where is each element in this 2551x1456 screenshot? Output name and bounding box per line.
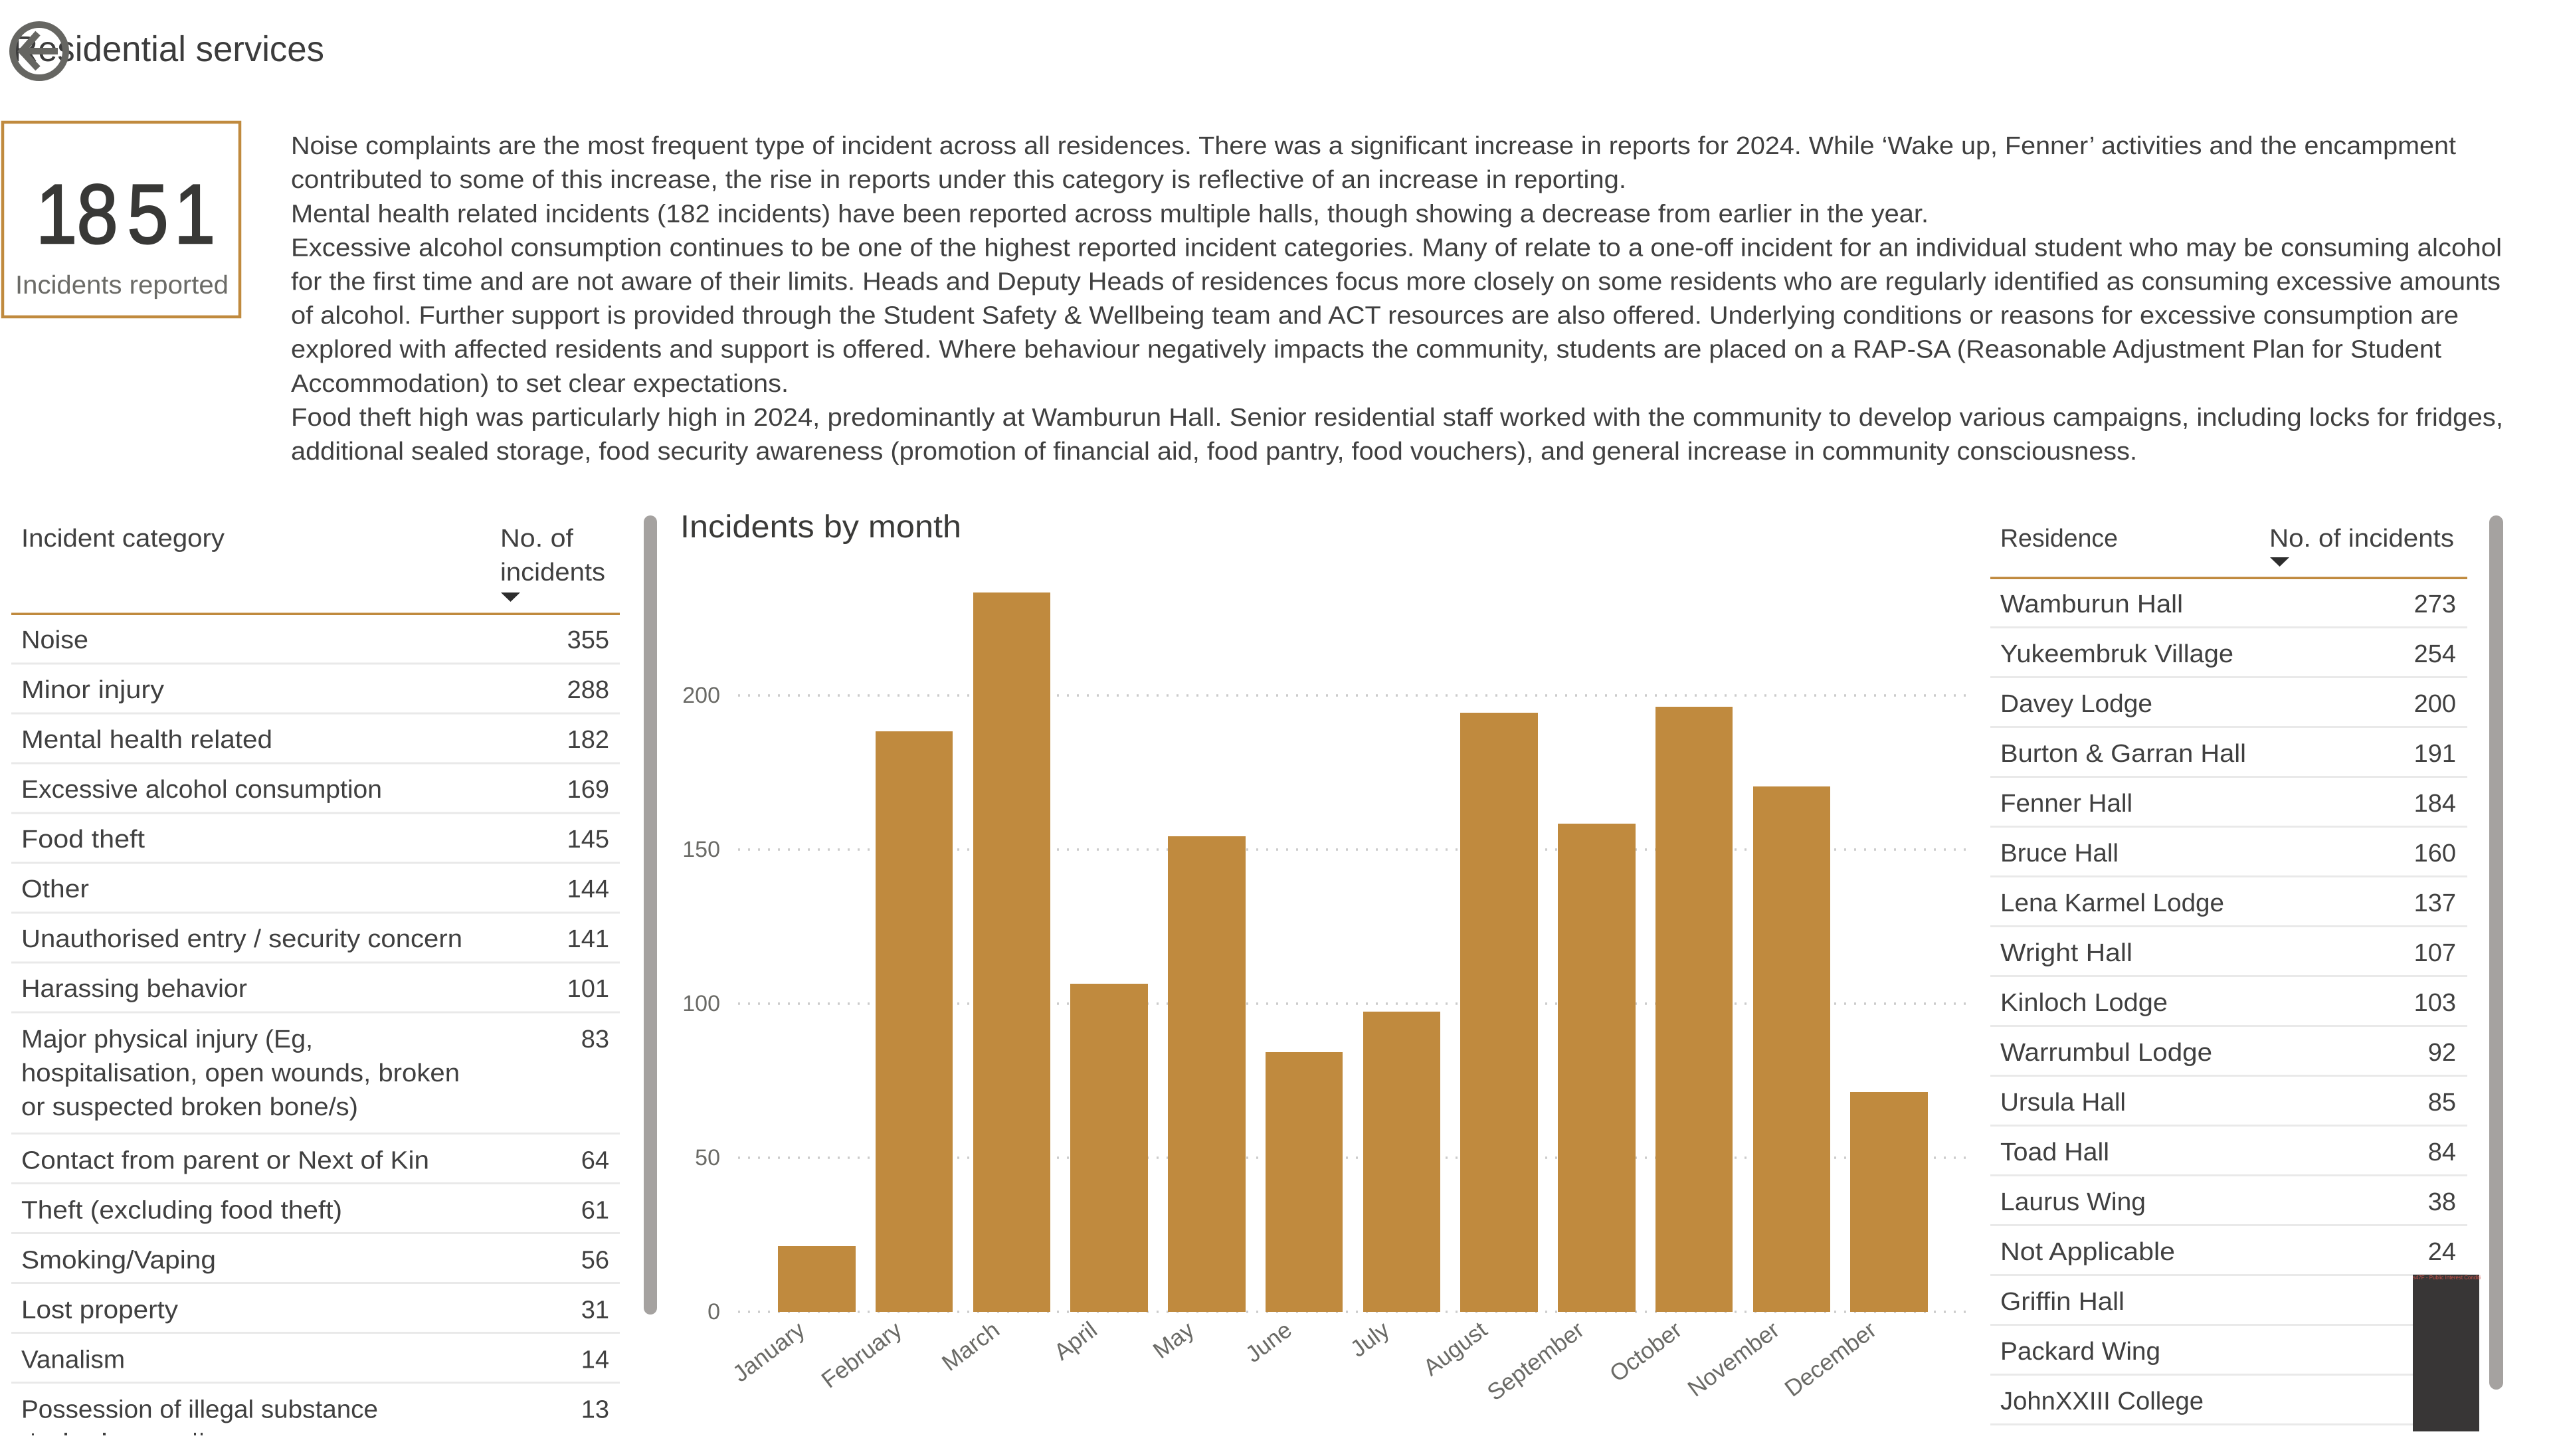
row: Warrumbul Lodge xyxy=(2000,1039,2456,1067)
commentary text block: contributed to some of this increase, the rise in reports under this category is reflective of an increase in reporting. xyxy=(291,166,1626,194)
row: Not Applicable: 24 xyxy=(2428,1238,2456,1266)
row: Vanalism: Vanalism xyxy=(21,1346,125,1374)
row: Yukeembruk Village: Yukeembruk Village xyxy=(2000,640,2233,668)
row: Kinloch Lodge xyxy=(2000,989,2456,1017)
commentary text block: Accommodation) to set clear expectations. xyxy=(291,370,789,398)
row: Mental health related: Mental health related xyxy=(21,726,272,754)
row: Not Applicable: Not Applicable xyxy=(2000,1238,2175,1266)
row: Fenner Hall: 184 xyxy=(2414,790,2456,818)
row: Possession of illegal substance: Possession of illegal substance xyxy=(21,1396,378,1424)
row: Unauthorised entry: 141 xyxy=(567,925,609,953)
row: Excessive alcohol consumption: Excessive alcohol consumption xyxy=(21,776,382,804)
panel: residence table xyxy=(1990,525,2467,1425)
row: Ursula Hall: Ursula Hall xyxy=(2000,1089,2126,1117)
y axis labels: 100 xyxy=(682,991,720,1016)
row: Other xyxy=(21,875,609,903)
row: Burton & Garran Hall: 191 xyxy=(2414,740,2456,768)
row: Burton & Garran Hall xyxy=(2000,740,2456,768)
commentary text block: additional sealed storage, food security awareness (promotion of financial aid, food pantry, food vouchers), and general increase in community consciousness. xyxy=(291,438,2137,466)
row: Bruce Hall: 160 xyxy=(2414,840,2456,867)
row: Lost property: Lost property xyxy=(21,1297,178,1324)
row: Major physical injury: or suspected broken bone/s) xyxy=(21,1093,358,1121)
row: Minor injury: 288 xyxy=(567,676,609,704)
row: Wamburun Hall: Wamburun Hall xyxy=(2000,591,2183,618)
row: Ursula Hall xyxy=(2000,1089,2456,1117)
row: Bruce Hall: Bruce Hall xyxy=(2000,840,2119,867)
panel: incident category table xyxy=(11,525,620,1435)
table header: incident category: No. of xyxy=(500,525,573,553)
row: Excessive alcohol consumption xyxy=(21,776,609,804)
row: Noise: 355 xyxy=(567,626,609,654)
x axis month labels: January xyxy=(728,1317,810,1387)
row: Toad Hall xyxy=(2000,1138,2456,1166)
x axis month labels: July xyxy=(1346,1317,1394,1362)
row: Minor injury: Minor injury xyxy=(21,676,164,704)
y axis labels xyxy=(682,683,720,1324)
x axis month labels: May xyxy=(1149,1317,1199,1364)
table header: incident category: incidents xyxy=(500,559,605,587)
table header: residence xyxy=(1990,525,2467,579)
row: Major physical injury xyxy=(21,1026,609,1121)
x axis month labels: February xyxy=(816,1317,907,1394)
row: Contact from parent: Contact from parent or Next of Kin xyxy=(21,1146,429,1174)
redaction box: s47F xyxy=(2413,1274,2481,1431)
row: Wright Hall: Wright Hall xyxy=(2000,939,2132,967)
commentary text block: Mental health related incidents (182 incidents) have been reported across multiple halls, though showing a decrease from earlier in the year. xyxy=(291,201,1929,228)
row: Smoking/Vaping: 56 xyxy=(581,1246,609,1274)
row: Laurus Wing: 38 xyxy=(2428,1188,2456,1216)
row: Warrumbul Lodge: 92 xyxy=(2428,1039,2456,1067)
row: Unauthorised entry: Unauthorised entry / security concern xyxy=(21,925,462,953)
row: Minor injury xyxy=(21,676,609,704)
row: Mental health related: 182 xyxy=(567,726,609,754)
row: Warrumbul Lodge: Warrumbul Lodge xyxy=(2000,1039,2212,1067)
table header: incident category: Incident category xyxy=(21,525,225,553)
row: Other: Other xyxy=(21,875,89,903)
chart title: Incidents by month xyxy=(680,509,961,545)
row: Excessive alcohol consumption: 169 xyxy=(567,776,609,804)
commentary text block xyxy=(291,132,2503,466)
row: Lena Karmel Lodge: Lena Karmel Lodge xyxy=(2000,889,2224,917)
row: Vanalism: 14 xyxy=(581,1346,609,1374)
row: Possession of illegal substance xyxy=(21,1396,609,1424)
row: Wamburun Hall: 273 xyxy=(2414,591,2456,618)
y axis labels: 200 xyxy=(682,683,720,708)
x axis month labels: August xyxy=(1418,1317,1492,1381)
row: Harassing behavior: Harassing behavior xyxy=(21,975,247,1003)
x axis month labels: April xyxy=(1049,1317,1102,1366)
icon: back arrow xyxy=(13,25,66,78)
row: Burton & Garran Hall: Burton & Garran Hall xyxy=(2000,740,2246,768)
row: Mental health related xyxy=(21,726,609,754)
commentary text block: Excessive alcohol consumption continues to be one of the highest reported incident categories. Many of relate to a one-off incident for an individual student who may be consuming alcohol xyxy=(291,234,2502,262)
row: Major physical injury: Major physical injury (Eg, xyxy=(21,1026,313,1053)
row: Not Applicable xyxy=(2000,1238,2456,1266)
commentary text block: explored with affected residents and support is offered. Where behaviour negatively impacts the community, students are placed on a RAP-SA (Reasonable Adjustment Plan for Student xyxy=(291,336,2441,364)
row: Noise xyxy=(21,626,609,654)
row: Contact from parent: 64 xyxy=(581,1146,609,1174)
title: Residential services xyxy=(13,29,324,69)
row: Noise: Noise xyxy=(21,626,88,654)
row: Kinloch Lodge: Kinloch Lodge xyxy=(2000,989,2168,1017)
row: Possession of illegal substance: 13 xyxy=(581,1396,609,1424)
row: Bruce Hall xyxy=(2000,840,2456,867)
table header: residence: Residence xyxy=(2000,525,2118,553)
bars xyxy=(778,592,1928,1312)
KPI card: incidents reported: 1851 xyxy=(36,167,215,261)
row: Major physical injury: 83 xyxy=(581,1026,609,1053)
chart: incidents by month xyxy=(680,509,1966,1406)
y axis labels: 50 xyxy=(695,1145,720,1170)
row: Fenner Hall: Fenner Hall xyxy=(2000,790,2132,818)
row: Wright Hall xyxy=(2000,939,2456,967)
row: Wamburun Hall xyxy=(2000,591,2456,618)
row: Smoking/Vaping: Smoking/Vaping xyxy=(21,1246,216,1274)
row: Food theft xyxy=(21,826,609,854)
row: Harassing behavior xyxy=(21,975,609,1003)
row: Packard Wing: Packard Wing xyxy=(2000,1338,2160,1366)
commentary text block: Noise complaints are the most frequent type of incident across all residences. There was a significant increase in reports for 2024. While ‘Wake up, Fenner’ activities and the encampment xyxy=(291,132,2456,160)
x axis month labels: December xyxy=(1780,1317,1881,1402)
scrollbar: residence table xyxy=(2489,515,2503,1390)
commentary text block: of alcohol. Further support is provided through the Student Safety & Wellbeing team and ACT resources are also offered. Underlying conditions or reasons for excessive consumption are xyxy=(291,302,2459,329)
scrollbar: incident table xyxy=(644,515,657,1315)
row: Food theft: Food theft xyxy=(21,826,145,854)
row: Toad Hall: 84 xyxy=(2428,1138,2456,1166)
x axis month labels: November xyxy=(1683,1317,1784,1402)
x axis month labels: June xyxy=(1241,1317,1297,1368)
row: Lost property xyxy=(21,1297,609,1324)
x axis month labels: October xyxy=(1605,1317,1687,1387)
commentary text block: for the first time and are not aware of their limits. Heads and Deputy Heads of residences focus more closely on some residents who are regularly identified as consuming excessive amounts xyxy=(291,268,2501,296)
row: Smoking/Vaping xyxy=(21,1246,609,1274)
row: Theft: 61 xyxy=(581,1197,609,1225)
row: Lost property: 31 xyxy=(581,1297,609,1324)
row: Kinloch Lodge: 103 xyxy=(2414,989,2456,1017)
row: Theft xyxy=(21,1197,609,1225)
y axis labels: 150 xyxy=(682,837,720,862)
x axis month labels: September xyxy=(1483,1317,1589,1406)
row: Harassing behavior: 101 xyxy=(567,975,609,1003)
row: Wright Hall: 107 xyxy=(2414,939,2456,967)
row: Lena Karmel Lodge: 137 xyxy=(2414,889,2456,917)
row: Contact from parent xyxy=(21,1146,609,1174)
table header: residence: No. of incidents xyxy=(2269,525,2454,553)
row: Lena Karmel Lodge xyxy=(2000,889,2456,917)
row: Toad Hall: Toad Hall xyxy=(2000,1138,2109,1166)
row: Laurus Wing xyxy=(2000,1188,2456,1216)
row: Laurus Wing: Laurus Wing xyxy=(2000,1188,2146,1216)
table header: incident category xyxy=(11,525,620,615)
row: Davey Lodge: 200 xyxy=(2414,690,2456,718)
row: Yukeembruk Village xyxy=(2000,640,2456,668)
KPI card: incidents reported xyxy=(3,122,240,317)
row: Food theft: 145 xyxy=(567,826,609,854)
row: Theft: Theft (excluding food theft) xyxy=(21,1197,342,1225)
row: Ursula Hall: 85 xyxy=(2428,1089,2456,1117)
row: Vanalism xyxy=(21,1346,609,1374)
row: Other: 144 xyxy=(567,875,609,903)
row: Davey Lodge xyxy=(2000,690,2456,718)
KPI card: incidents reported: Incidents reported xyxy=(15,271,229,300)
row: JohnXXIII College: JohnXXIII College xyxy=(2000,1388,2204,1415)
redaction box: s47F: s47F - Public Interest Conditi xyxy=(2413,1274,2481,1281)
row: Fenner Hall xyxy=(2000,790,2456,818)
row: Yukeembruk Village: 254 xyxy=(2414,640,2456,668)
y axis labels: 0 xyxy=(708,1299,720,1324)
commentary text block: Food theft high was particularly high in 2024, predominantly at Wamburun Hall. Senior residential staff worked with the community to develop various campaigns, including locks for fridges, xyxy=(291,404,2503,432)
row: Major physical injury: hospitalisation, open wounds, broken xyxy=(21,1059,460,1087)
x axis month labels xyxy=(728,1317,1881,1406)
row: Griffin Hall: Griffin Hall xyxy=(2000,1288,2125,1316)
x axis month labels: March xyxy=(937,1317,1004,1376)
row: Davey Lodge: Davey Lodge xyxy=(2000,690,2152,718)
